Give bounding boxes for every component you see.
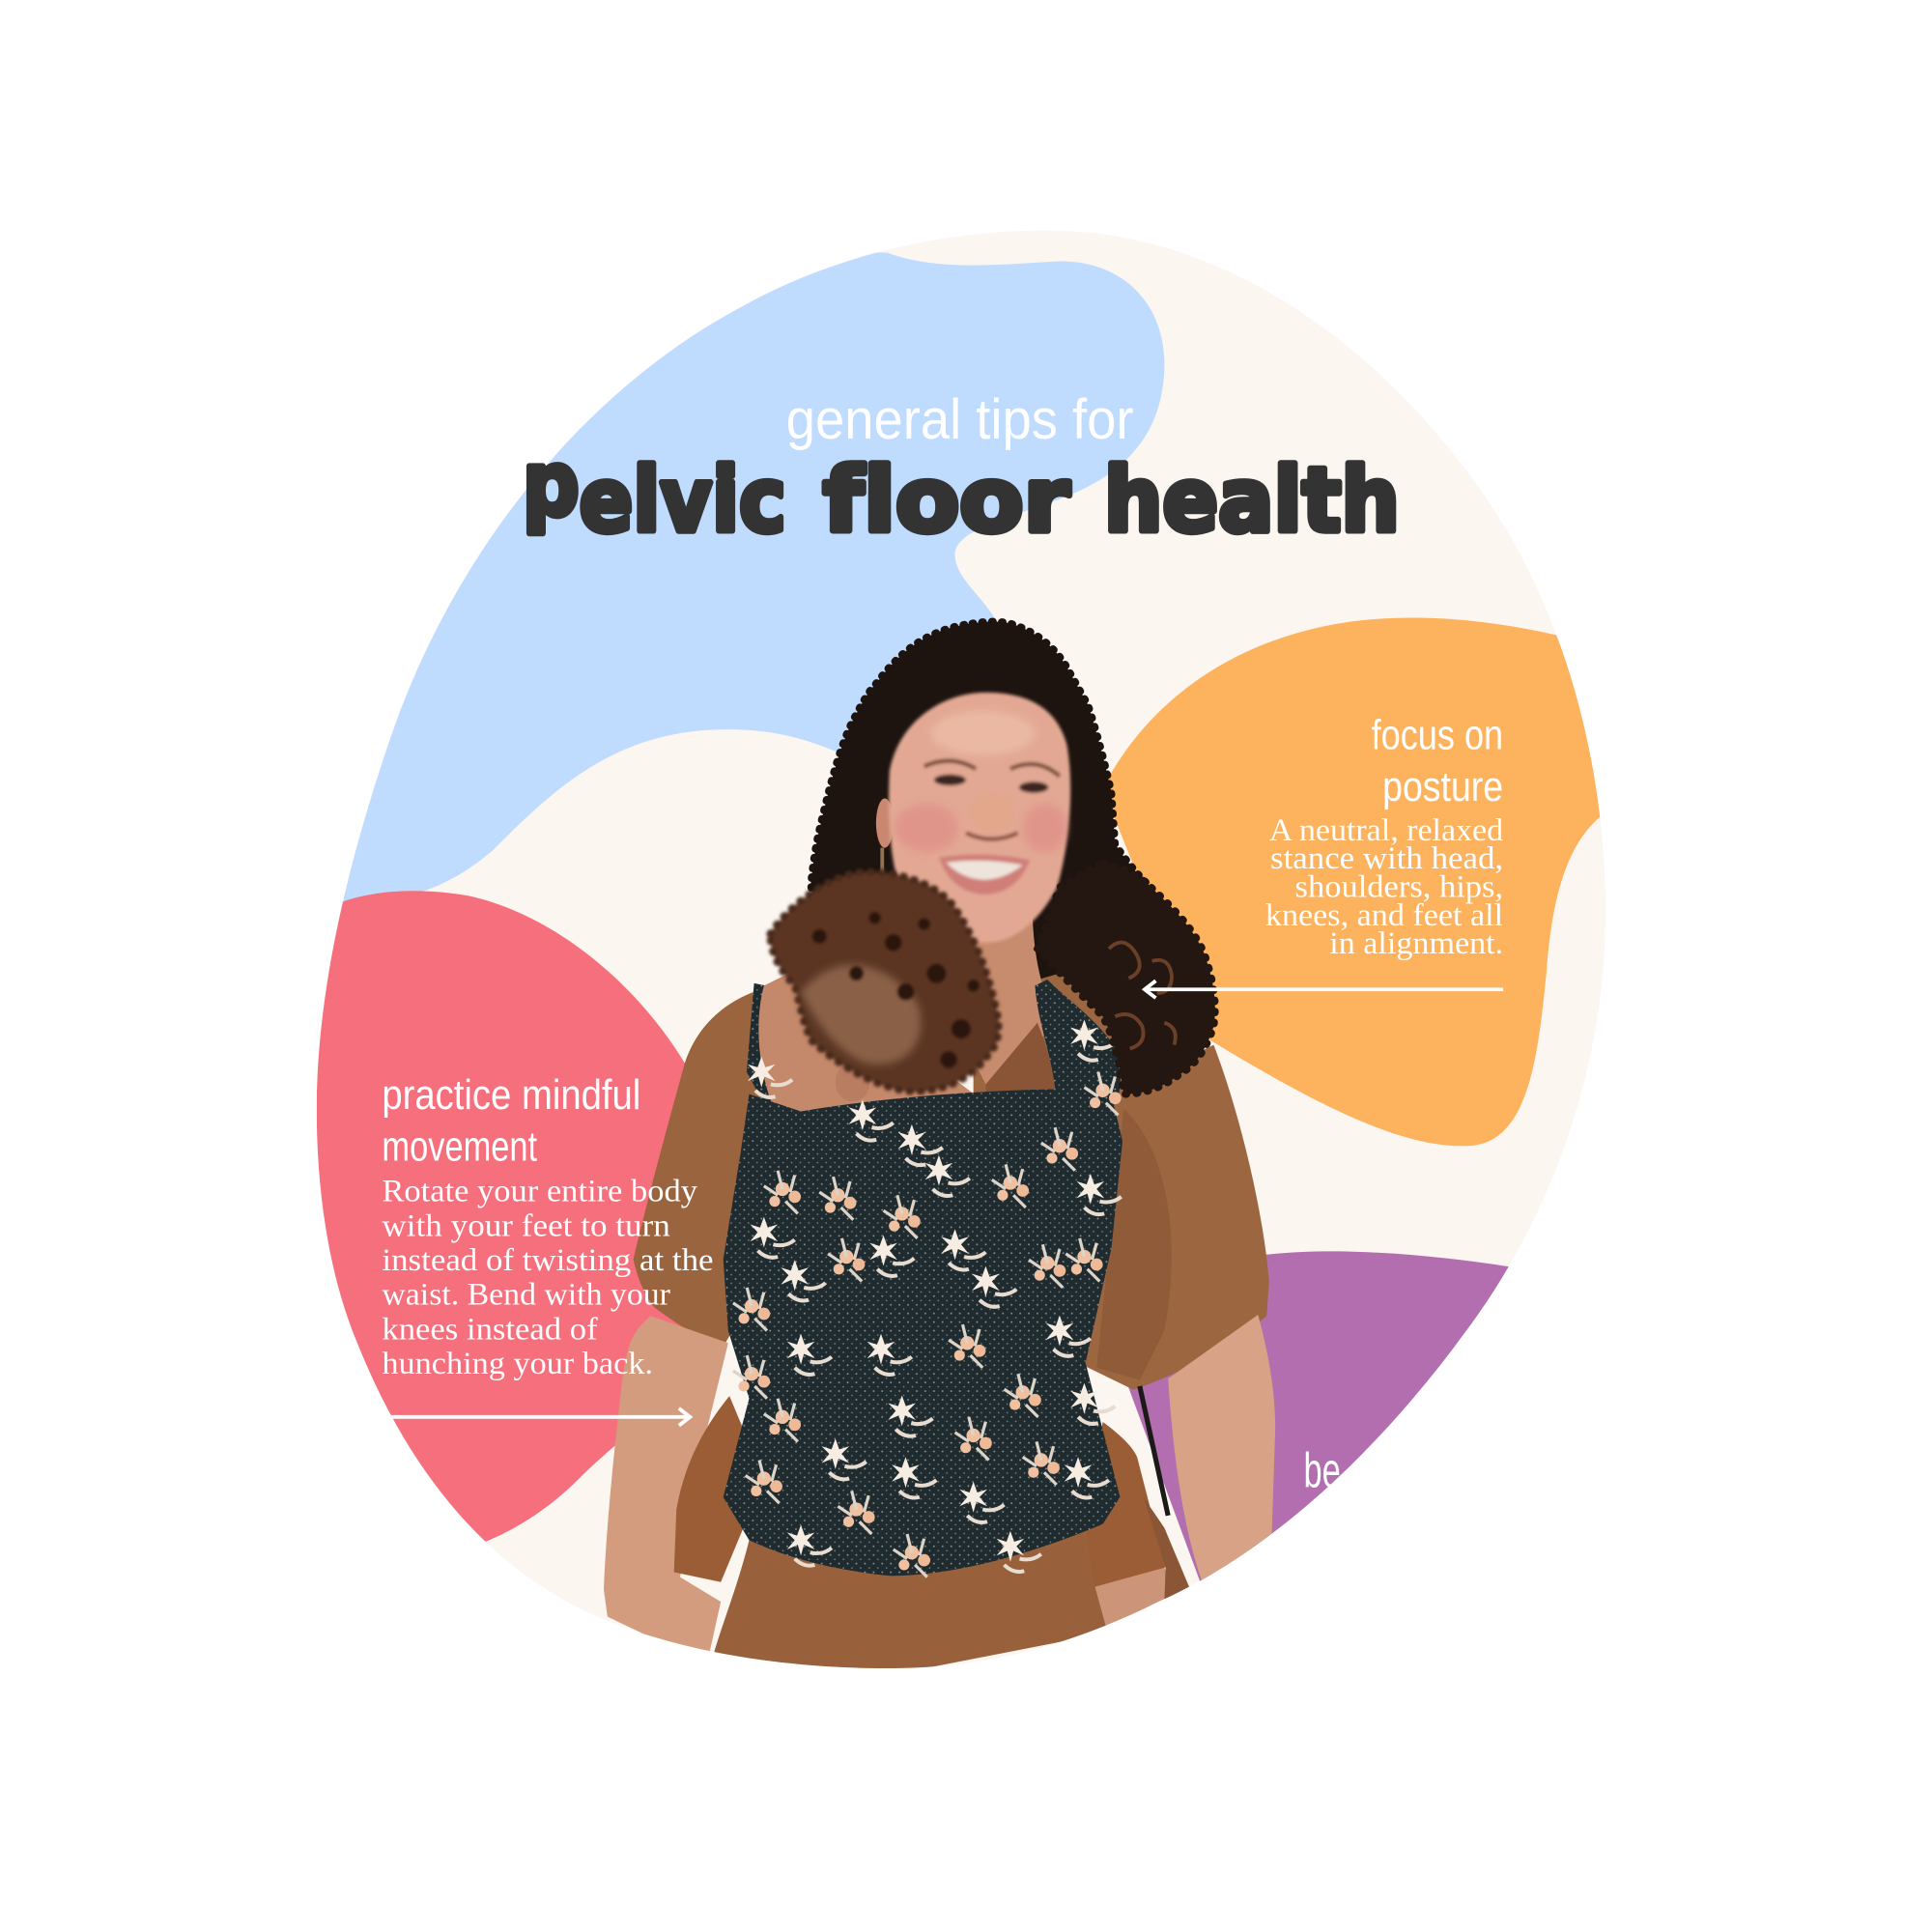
tip: practice mindful movement: instead of twisting at the [382, 1242, 714, 1278]
tip: practice mindful movement [382, 1072, 714, 1381]
tip: focus on posture: knees, and feet all [1265, 897, 1503, 933]
arrow: posture [1145, 980, 1503, 998]
face [889, 693, 1070, 943]
tip: practice mindful movement: waist. Bend with your [382, 1277, 670, 1313]
baby hair [770, 872, 999, 1092]
ear [876, 799, 894, 848]
panel: orange blob [1103, 618, 1614, 1146]
tip: practice mindful movement: knees instead of [382, 1311, 599, 1347]
neckline dress [985, 1022, 1055, 1092]
tip: focus on posture [1265, 713, 1504, 961]
coloured shapes [246, 246, 1614, 1602]
title: health [1104, 449, 1400, 553]
cheek right [1023, 804, 1067, 853]
mother's back hair [810, 621, 1146, 1023]
baby head skin [758, 974, 972, 1111]
carrier tie [1140, 1386, 1168, 1516]
baby hair highlight [801, 965, 921, 1065]
eye left [934, 775, 966, 785]
panel: red blob [317, 891, 685, 1542]
baby leg left [674, 1396, 743, 1582]
title [523, 433, 1400, 553]
carrier strap left [747, 983, 771, 1101]
cheek left [895, 804, 958, 853]
mouth [939, 854, 1030, 895]
eyebrows [924, 761, 1060, 777]
dress right fold [1144, 1497, 1190, 1602]
title: p [523, 433, 580, 536]
hair curl texture [1109, 943, 1176, 1048]
forehead light [931, 711, 1035, 755]
carrier floral print [733, 1019, 1122, 1577]
teeth [947, 861, 1023, 880]
tip: practice mindful movement: movement [382, 1124, 537, 1171]
title: elvic [580, 449, 786, 553]
sleeve shadow [1096, 1109, 1172, 1380]
lower dress [711, 1528, 1108, 1676]
tip: practice mindful movement: practice mindful [382, 1072, 640, 1119]
left arm and hand [604, 1316, 728, 1658]
baby leg right [1084, 1422, 1166, 1587]
panel: blue blob [342, 252, 1165, 903]
tip: clipped heading: be [1303, 1443, 1341, 1498]
baby foot right [1095, 1567, 1175, 1626]
baby hair curls [812, 912, 980, 1068]
heading [523, 388, 1400, 553]
tip: practice mindful movement: with your feet to turn [382, 1208, 670, 1243]
tip: focus on posture: shoulders, hips, [1295, 869, 1503, 905]
title: floor [823, 449, 1070, 553]
background blob [317, 231, 1605, 1668]
tip: focus on posture: posture [1382, 764, 1503, 810]
panel: purple blob [1122, 1251, 1509, 1602]
nose tip [970, 793, 1014, 833]
tip: practice mindful movement: hunching your back. [382, 1346, 653, 1381]
tip: focus on posture: A neutral, relaxed [1269, 812, 1504, 848]
neck [974, 918, 1044, 1084]
tip: practice mindful movement: Rotate your entire body [382, 1174, 697, 1209]
tip: focus on posture: in alignment. [1329, 925, 1503, 961]
carrier strap right [1035, 980, 1122, 1096]
right sleeve and upper dress [974, 974, 1269, 1390]
carrier body [724, 1084, 1122, 1576]
arrow: movement [387, 1408, 690, 1426]
baby ear [836, 1066, 869, 1101]
nose shadow [966, 833, 1018, 839]
photo: mother and baby in carrier [604, 621, 1275, 1676]
earring [881, 848, 884, 877]
eye right [1019, 781, 1048, 793]
mother's front hair lock [1037, 863, 1215, 1094]
tip: focus on posture: stance with head, [1270, 840, 1503, 876]
kicker: general tips for: general tips for [786, 388, 1133, 451]
left sleeve and upper dress [634, 992, 761, 1343]
tip: focus on posture: focus on [1372, 713, 1503, 759]
right arm [1168, 1315, 1275, 1583]
